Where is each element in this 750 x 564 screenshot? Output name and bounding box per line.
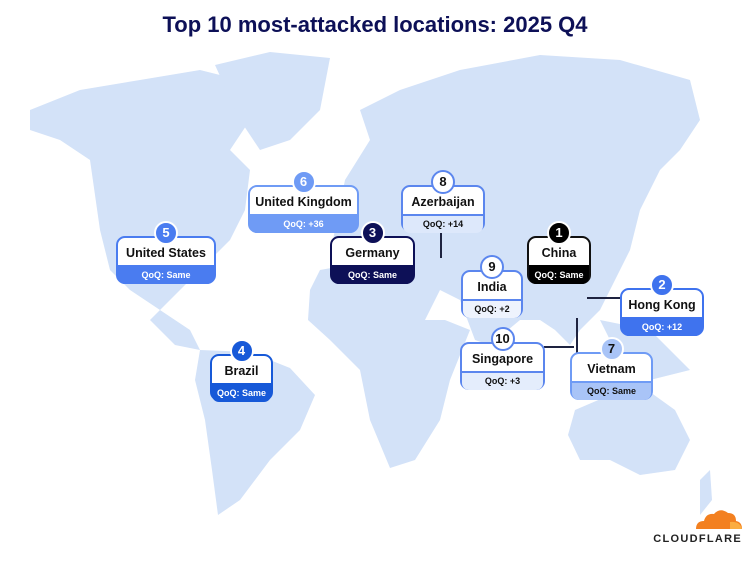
label: United Kingdom: United Kingdom [255, 195, 352, 209]
text: 1 [555, 225, 563, 240]
label: India [461, 270, 523, 318]
label: Azerbaijan: QoQ: +14 [423, 219, 463, 229]
label: India: QoQ: +2 [474, 304, 510, 314]
label: Singapore: Singapore [472, 352, 533, 366]
label: United States [116, 236, 216, 284]
label: Germany [330, 236, 415, 284]
text: 8 [439, 174, 447, 189]
label: Vietnam [570, 352, 653, 400]
text: 7 [608, 341, 615, 356]
label: United Kingdom: QoQ: +36 [283, 219, 324, 229]
logo: Cloudflare [653, 510, 742, 545]
label: Singapore [460, 342, 545, 390]
text: 2 [658, 277, 666, 292]
label: United Kingdom [248, 185, 359, 233]
label: China: China [542, 246, 576, 260]
logo: Cloudflare: CLOUDFLARE [653, 533, 742, 545]
label: Vietnam: QoQ: Same [587, 386, 636, 396]
label: United States: United States [126, 246, 206, 260]
connector lines [440, 233, 620, 352]
text: 6 [300, 174, 307, 189]
title: Top 10 most-attacked locations: 2025 Q4 [162, 12, 588, 37]
label: Hong Kong: Hong Kong [628, 298, 696, 312]
label: India: India [477, 280, 507, 294]
label: Hong Kong: QoQ: +12 [642, 322, 682, 332]
label: Germany: QoQ: Same [348, 270, 397, 280]
text: 5 [162, 225, 170, 240]
label: Brazil: QoQ: Same [217, 388, 266, 398]
label: Brazil: Brazil [224, 364, 259, 378]
text: 10 [495, 331, 510, 346]
label: United States: QoQ: Same [141, 270, 190, 280]
label: Hong Kong [620, 288, 704, 336]
label: Azerbaijan: Azerbaijan [411, 195, 475, 209]
label: China: QoQ: Same [534, 270, 584, 280]
text: 9 [488, 259, 496, 274]
label: China [527, 236, 591, 284]
label: Vietnam: Vietnam [587, 362, 636, 376]
label: Singapore: QoQ: +3 [485, 376, 520, 386]
text: 4 [238, 343, 245, 358]
label: Brazil [210, 354, 273, 401]
label: Azerbaijan [401, 185, 485, 232]
text: 3 [369, 225, 376, 240]
label: Germany: Germany [345, 246, 400, 260]
